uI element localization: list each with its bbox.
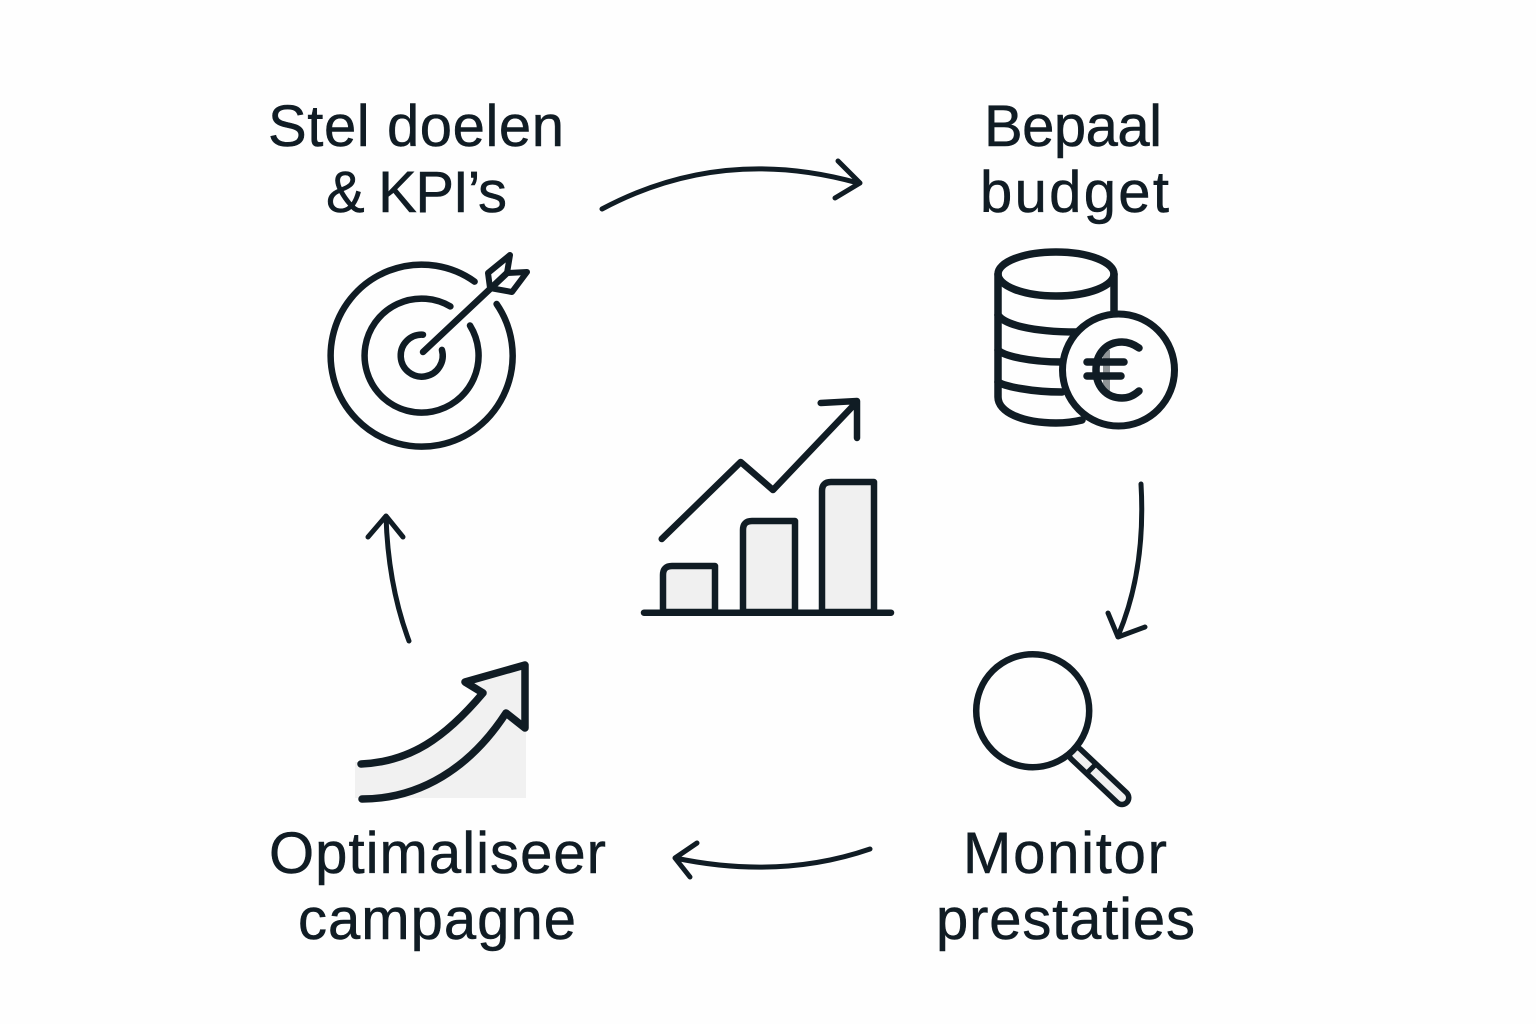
heading: Optimaliseer campagne: campagne	[298, 887, 576, 952]
heading: Monitor prestaties: prestaties	[936, 887, 1195, 952]
heading: Optimaliseer campagne: Optimaliseer	[269, 821, 606, 886]
arrow: budget to monitor	[1108, 484, 1145, 637]
arrow: monitor to optimise	[675, 843, 870, 877]
heading: Bepaal budget: budget	[980, 160, 1169, 225]
icon: magnifying glass	[976, 654, 1122, 798]
baseline	[644, 609, 891, 616]
icon: target with arrow	[331, 255, 527, 447]
heading: Monitor prestaties	[936, 821, 1195, 952]
arrow: goals to budget	[602, 161, 860, 209]
bar: tall	[822, 482, 874, 612]
arrow: optimise to goals	[368, 516, 409, 641]
heading: Stel doelen & KPI's: Stel doelen	[268, 94, 564, 159]
heading: Monitor prestaties: Monitor	[963, 821, 1167, 886]
heading: Bepaal budget: Bepaal	[984, 94, 1162, 159]
heading: Bepaal budget	[980, 94, 1169, 225]
chart: rising bars with trend line	[644, 401, 891, 613]
heading: Stel doelen & KPI's	[268, 94, 564, 225]
bar: medium	[743, 521, 795, 612]
heading: Stel doelen & KPI's: & KPI’s	[326, 160, 507, 225]
heading: Optimaliseer campagne	[269, 821, 606, 952]
icon: growth arrow	[355, 665, 526, 799]
icon: coin stack with euro	[998, 252, 1174, 426]
trend line arrow	[662, 401, 857, 539]
bar: small	[663, 566, 715, 612]
